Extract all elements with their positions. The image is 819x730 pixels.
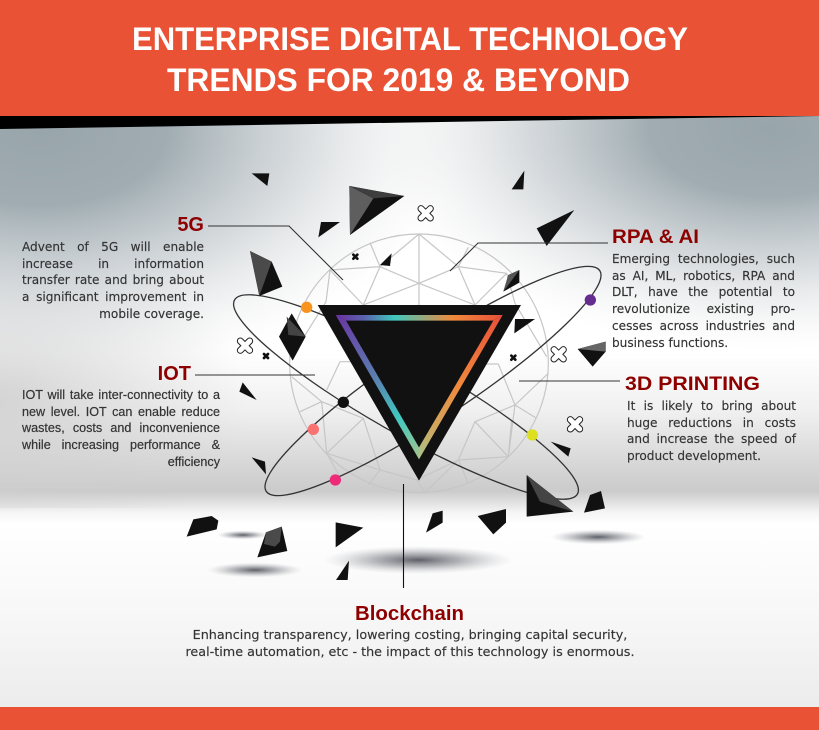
text: RPA & AI: cesses across industries and — [612, 319, 795, 333]
header band — [0, 0, 819, 116]
text: 3D Printing: product development. — [627, 449, 761, 463]
orbit dots — [301, 294, 596, 486]
text: IOT: while increasing performance & — [22, 438, 220, 452]
title: ENTERPRISE DIGITAL TECHNOLOGY — [132, 21, 688, 57]
text: IOT: IOT will take inter-connectivity to a — [22, 388, 220, 402]
text: 3D Printing: It is likely to bring about — [627, 399, 796, 413]
text: 5G: a significant improvement in — [22, 290, 204, 304]
small black crosses — [264, 255, 515, 360]
heading: 5G: 5G — [177, 214, 204, 236]
text: RPA & AI — [612, 252, 795, 350]
heading: Blockchain: Blockchain — [355, 603, 464, 625]
title: TRENDS FOR 2019 & BEYOND — [167, 62, 630, 98]
text: 3D Printing — [627, 399, 796, 463]
text: Blockchain: real-time automation, etc - the impact of this technology is enormous. — [185, 645, 635, 660]
heading: IOT: IOT — [158, 363, 191, 385]
black wedge under header — [0, 116, 819, 129]
text: RPA & AI: DLT, have the potential to — [612, 285, 795, 299]
text: IOT: efficiency — [168, 455, 220, 469]
heading: 3D Printing: 3D PRINTING — [625, 374, 760, 395]
outlined cross icons — [240, 209, 580, 429]
text: 5G: increase in information — [22, 257, 204, 271]
leader line: RPA & AI — [450, 243, 608, 271]
diamond wireframe — [290, 234, 548, 493]
text: 5G: mobile coverage. — [99, 307, 204, 321]
text: 5G — [22, 240, 204, 321]
text: 3D Printing: and increase the speed of — [627, 432, 796, 446]
text: RPA & AI: revolutionize existing pro- — [612, 302, 795, 316]
text: Blockchain — [185, 628, 635, 660]
text: IOT: wastes, costs and inconvenience — [22, 421, 220, 435]
leader line: 3D Printing — [519, 380, 620, 382]
leader line: IOT — [195, 374, 315, 376]
text: 5G: transfer rate and bring about — [22, 273, 204, 287]
title — [132, 21, 688, 98]
text: IOT: new level. IOT can enable reduce — [22, 405, 220, 419]
text: 3D Printing: huge reductions in costs — [627, 416, 796, 430]
orbit ellipses — [216, 240, 620, 526]
central triangle — [318, 305, 521, 481]
footer band — [0, 707, 819, 730]
text: IOT — [22, 388, 220, 469]
heading: RPA & AI: RPA & AI — [612, 227, 699, 248]
text: Blockchain: Enhancing transparency, lowering costing, bringing capital security, — [193, 628, 627, 643]
text: RPA & AI: as AI, ML, robotics, RPA and — [612, 269, 795, 283]
floor shadows — [207, 530, 646, 578]
text: RPA & AI: Emerging technologies, such — [612, 252, 795, 266]
text: RPA & AI: business functions. — [612, 336, 728, 350]
lower shards — [187, 475, 605, 580]
leader line: Blockchain — [402, 484, 404, 588]
text: 5G: Advent of 5G will enable — [22, 240, 204, 254]
floating shards — [239, 171, 606, 474]
leader line: 5G — [208, 226, 343, 280]
